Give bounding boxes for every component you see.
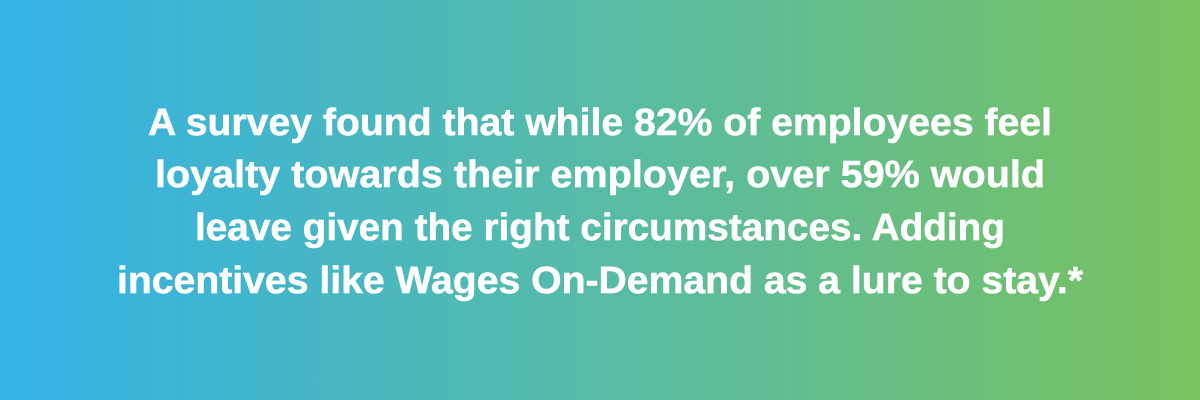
text block: survey statement: loyalty towards their employer, over 59% would [155, 154, 1045, 196]
text block: survey statement: leave given the right circumstances. Adding [195, 207, 1005, 249]
text block: survey statement [117, 102, 1083, 302]
text block: survey statement: incentives like Wages On-Demand as a lure to stay.* [117, 260, 1083, 302]
text block: survey statement: A survey found that while 82% of employees feel [148, 102, 1052, 144]
